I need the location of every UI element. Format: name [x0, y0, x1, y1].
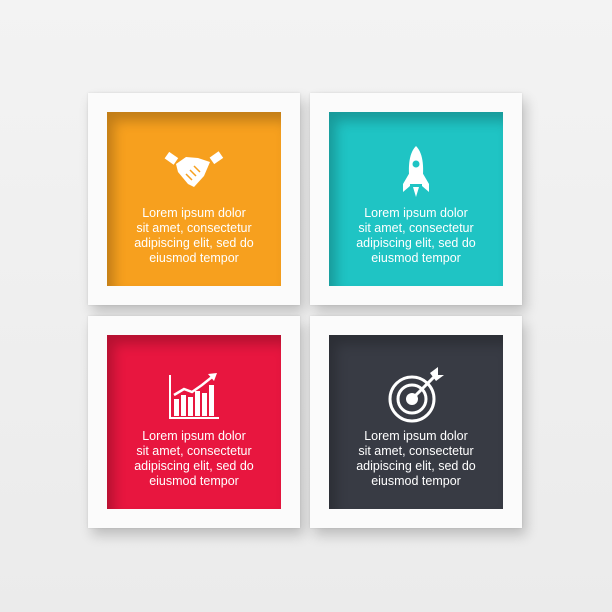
- text block: eiusmod tempor: [149, 474, 239, 488]
- text block: Lorem ipsum dolor: [142, 206, 246, 220]
- text block: adipiscing elit, sed do: [356, 459, 476, 473]
- panel: top-left orange: [88, 93, 300, 305]
- text block: eiusmod tempor: [149, 251, 239, 265]
- icon: target: [388, 367, 444, 422]
- text block: sit amet, consectetur: [136, 444, 252, 458]
- text block: [356, 206, 476, 265]
- text block: adipiscing elit, sed do: [134, 459, 254, 473]
- panel: top-right teal: [310, 93, 522, 305]
- icon: bar chart: [169, 373, 219, 419]
- text block: adipiscing elit, sed do: [356, 236, 476, 250]
- icon: handshake: [164, 151, 224, 187]
- text block: [356, 429, 476, 488]
- text block: sit amet, consectetur: [358, 444, 474, 458]
- panel: bottom-left red: [88, 316, 300, 528]
- text block: sit amet, consectetur: [136, 221, 252, 235]
- text block: [134, 429, 254, 488]
- text block: sit amet, consectetur: [358, 221, 474, 235]
- text block: adipiscing elit, sed do: [134, 236, 254, 250]
- icon: rocket: [403, 146, 429, 197]
- text block: Lorem ipsum dolor: [364, 429, 468, 443]
- text block: eiusmod tempor: [371, 474, 461, 488]
- text block: Lorem ipsum dolor: [142, 429, 246, 443]
- text block: Lorem ipsum dolor: [364, 206, 468, 220]
- text block: eiusmod tempor: [371, 251, 461, 265]
- text block: [134, 206, 254, 265]
- panel: bottom-right dark: [310, 316, 522, 528]
